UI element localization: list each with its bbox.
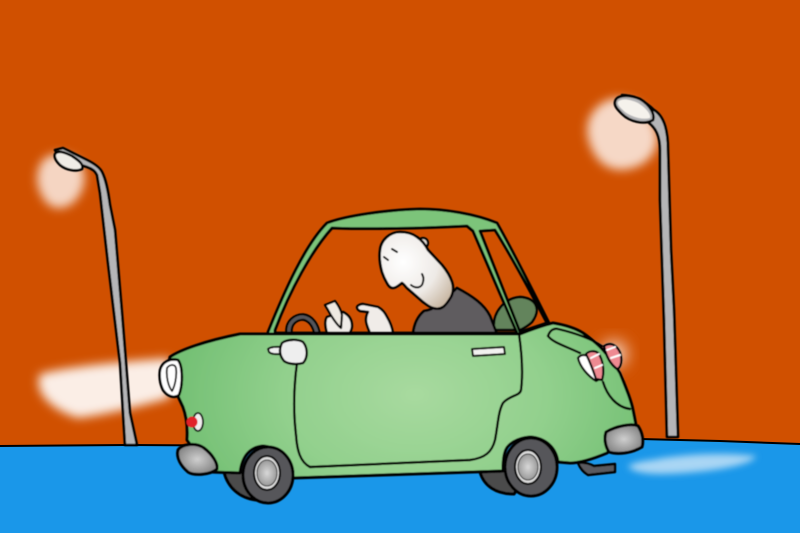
steering wheel <box>289 317 317 334</box>
exhaust fog left <box>39 358 170 418</box>
tail light near <box>578 351 603 381</box>
door handle <box>472 347 505 356</box>
lamp lens right <box>618 99 650 119</box>
ear <box>418 238 428 248</box>
hubcap <box>515 450 541 484</box>
front bumper <box>178 444 217 474</box>
car body <box>163 323 636 478</box>
rear wing crease <box>548 329 630 409</box>
lens red <box>586 351 603 380</box>
far front wheel <box>480 470 530 494</box>
front wheel <box>505 438 557 496</box>
lamp pole left <box>55 148 137 445</box>
far rear wheel <box>224 470 275 500</box>
face <box>380 232 453 309</box>
road <box>0 439 800 533</box>
right hand pointing <box>357 304 393 333</box>
hubcap centre <box>518 454 538 480</box>
indicator lamp <box>186 416 198 428</box>
rear bumper <box>605 425 643 453</box>
lamp glow left <box>37 154 84 208</box>
lamp head left <box>55 152 82 170</box>
front headlight <box>160 359 182 397</box>
lens white <box>578 355 598 381</box>
rear wheel <box>243 447 293 503</box>
car <box>160 209 643 503</box>
lamp head right <box>615 96 653 122</box>
indicator rim <box>193 413 203 431</box>
street lamp right <box>615 95 678 437</box>
tyre <box>243 447 293 503</box>
door outline <box>294 334 522 467</box>
wing mirror <box>268 340 307 364</box>
indicator light <box>186 413 203 431</box>
hubcap <box>254 456 280 490</box>
lens stripes <box>591 354 602 368</box>
mirror head <box>280 340 307 364</box>
left hand holding phone <box>325 301 352 334</box>
person torso <box>413 288 497 334</box>
hubcap centre <box>257 460 277 486</box>
tail light far <box>604 344 621 369</box>
person head <box>380 232 453 309</box>
tyre <box>505 438 557 496</box>
street lamp left <box>55 148 137 445</box>
eyes and smile <box>384 249 423 287</box>
lamp glow right <box>587 98 657 170</box>
roof and pillars <box>268 209 550 334</box>
phone <box>325 301 342 328</box>
lamp pole right <box>620 95 678 437</box>
far taillight glow <box>601 341 627 367</box>
exhaust fog right <box>628 454 756 474</box>
exhaust pipe <box>578 463 615 475</box>
hand <box>326 312 352 334</box>
mirror stalk <box>268 347 285 354</box>
seat <box>494 297 537 330</box>
